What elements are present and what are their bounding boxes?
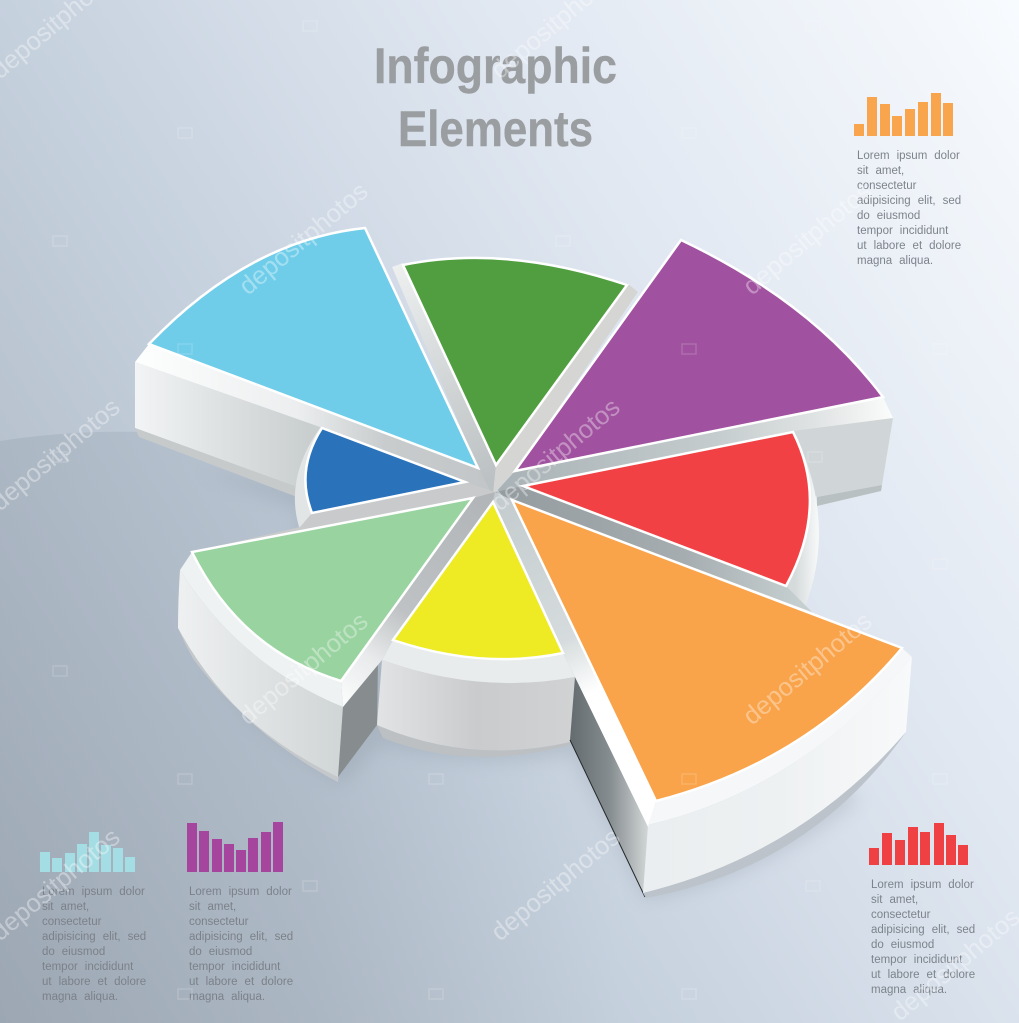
teal panel text: do eiusmod — [42, 946, 105, 958]
body: purple slice side — [780, 418, 893, 497]
teal panel text: adipisicing elit, sed — [42, 931, 146, 943]
watermark: depositphotos — [486, 823, 626, 947]
red panel text: do eiusmod — [871, 939, 934, 951]
body: light blue slice side — [135, 362, 320, 487]
teal bar chart — [40, 832, 135, 872]
panel: teal bar chart and text — [40, 832, 146, 1003]
orange slice foot shadow — [643, 732, 906, 898]
teal panel text: Lorem ipsum dolor — [42, 886, 145, 898]
watermark: depositphotos — [738, 177, 878, 301]
slice: red — [523, 432, 810, 586]
orange panel text: consectetur — [857, 180, 917, 192]
purple panel text: adipisicing elit, sed — [189, 931, 293, 943]
body: red slice rim — [780, 430, 819, 607]
red panel text: adipisicing elit, sed — [871, 924, 975, 936]
red panel text: tempor incididunt — [871, 954, 963, 966]
title — [374, 38, 617, 157]
orange bar chart — [854, 93, 953, 136]
body: light green slice foot — [178, 628, 338, 782]
purple panel text: do eiusmod — [189, 946, 252, 958]
teal panel text: tempor incididunt — [42, 961, 134, 973]
bevel: light green outer — [180, 552, 343, 707]
body: yellow slice side — [377, 660, 575, 750]
title: Elements — [398, 101, 593, 157]
bevel: purple lower edge — [495, 397, 893, 493]
red panel text: sit amet, — [871, 894, 918, 906]
purple panel text: consectetur — [189, 916, 249, 928]
purple panel text: Lorem ipsum dolor — [189, 886, 292, 898]
panel: orange bar chart and text — [854, 93, 961, 267]
bevel: yellow outer — [382, 640, 575, 683]
red panel text: Lorem ipsum dolor — [871, 879, 974, 891]
purple panel text: ut labore et dolore — [189, 976, 293, 988]
watermark: depositphotos — [738, 607, 878, 731]
teal panel text: ut labore et dolore — [42, 976, 146, 988]
bevel: light blue to green — [392, 263, 496, 496]
teal panel text: magna aliqua. — [42, 991, 118, 1003]
purple panel text: tempor incididunt — [189, 961, 281, 973]
bevel: orange outer — [648, 648, 912, 825]
purple bar chart — [187, 822, 283, 872]
body: yellow slice foot — [377, 725, 570, 757]
slice: light green — [192, 498, 473, 681]
red panel text: magna aliqua. — [871, 984, 947, 996]
body: light green slice dark wall — [338, 660, 378, 777]
red bar chart — [869, 823, 968, 865]
teal panel text: sit amet, — [42, 901, 89, 913]
orange panel text: sit amet, — [857, 165, 904, 177]
panel: purple bar chart and text — [187, 822, 293, 1003]
panel: red bar chart and text — [869, 823, 975, 996]
bevel: yellow to light green — [341, 492, 495, 707]
red panel text: ut labore et dolore — [871, 969, 975, 981]
watermark: depositphotos — [486, 393, 626, 517]
slice: light blue — [149, 228, 478, 468]
watermark: depositphotos — [234, 177, 374, 301]
watermark: depositphotos — [234, 607, 374, 731]
bevel: light green to dark blue — [192, 482, 495, 552]
bevel: orange to yellow — [493, 492, 656, 827]
orange panel text: tempor incididunt — [857, 225, 949, 237]
slice: purple — [515, 240, 883, 471]
pie drop shadow — [200, 470, 860, 900]
floor horizon band — [0, 432, 620, 1023]
teal panel text: consectetur — [42, 916, 102, 928]
body: light green slice side — [178, 570, 343, 782]
slice: yellow — [393, 502, 563, 659]
purple panel text: magna aliqua. — [189, 991, 265, 1003]
orange panel text: adipisicing elit, sed — [857, 195, 961, 207]
slice: dark blue — [305, 428, 465, 513]
purple panel text: sit amet, — [189, 901, 236, 913]
orange panel text: magna aliqua. — [857, 255, 933, 267]
body: orange slice dark wall — [570, 677, 648, 893]
slice: green — [403, 258, 627, 465]
body: purple slice foot — [817, 485, 882, 506]
red panel text: consectetur — [871, 909, 931, 921]
body: orange slice side — [643, 657, 912, 893]
title: Infographic — [374, 38, 617, 94]
pie chart — [135, 228, 912, 898]
orange panel text: ut labore et dolore — [857, 240, 961, 252]
orange wall floor line — [570, 740, 645, 897]
orange panel text: Lorem ipsum dolor — [857, 150, 960, 162]
orange panel text: do eiusmod — [857, 210, 920, 222]
body: dark blue slice rim — [295, 425, 330, 530]
bevel: red to orange — [495, 486, 812, 612]
bevel: green to purple — [493, 283, 638, 494]
slice: orange — [512, 500, 902, 801]
bevel: light blue lower edge — [135, 344, 493, 494]
body: light blue slice foot — [135, 428, 297, 497]
